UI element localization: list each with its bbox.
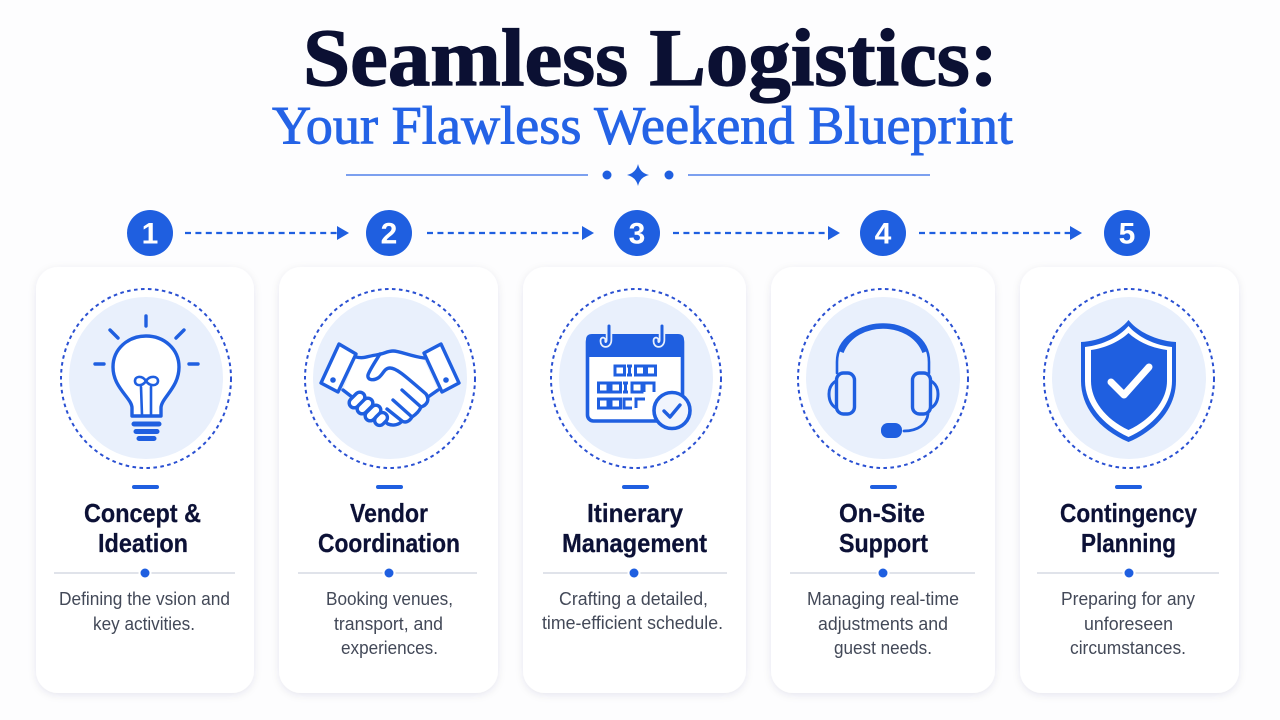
heading: Management — [562, 528, 707, 558]
icon: handshake — [321, 344, 459, 427]
description — [326, 588, 453, 658]
description — [542, 588, 723, 633]
step 1 badge: 1 — [142, 218, 158, 250]
title: Seamless Logistics: — [303, 12, 998, 103]
heading: Itinerary — [587, 498, 683, 528]
description: unforeseen — [1084, 613, 1173, 634]
accent bar — [376, 485, 403, 489]
arrow 4 to 5 — [919, 226, 1082, 240]
description — [1061, 588, 1196, 658]
step 4 badge: 4 — [875, 218, 892, 250]
description: Preparing for any — [1061, 588, 1196, 609]
description: Crafting a detailed, — [559, 588, 708, 609]
description — [807, 588, 959, 658]
arrow 1 to 2 — [185, 226, 349, 240]
heading: Coordination — [318, 528, 460, 558]
heading: On-Site — [839, 498, 925, 528]
accent bar — [132, 485, 159, 489]
panel: itinerary management — [523, 267, 746, 693]
panel: concept and ideation — [36, 267, 254, 693]
heading — [562, 498, 707, 558]
heading — [839, 498, 928, 558]
panel: on-site support — [771, 267, 995, 693]
panel: contingency planning — [1020, 267, 1239, 693]
step 5 badge: 5 — [1119, 218, 1135, 250]
description: experiences. — [341, 637, 438, 658]
step 3 badge: 3 — [629, 218, 645, 250]
arrow 2 to 3 — [427, 226, 594, 240]
icon: headset — [829, 325, 938, 438]
icon: light bulb — [95, 316, 198, 438]
description: time-efficient schedule. — [542, 612, 723, 633]
ornament divider — [346, 164, 930, 186]
description: Managing real-time — [807, 588, 959, 609]
heading: Support — [839, 528, 928, 558]
heading — [84, 498, 201, 558]
description: circumstances. — [1070, 637, 1186, 658]
description: Booking venues, — [326, 588, 453, 609]
accent bar — [870, 485, 897, 489]
subtitle: Your Flawless Weekend Blueprint — [272, 96, 1013, 156]
step 5 badge — [1104, 210, 1150, 256]
accent bar — [1115, 485, 1142, 489]
description: guest needs. — [834, 637, 932, 658]
step 2 badge — [366, 210, 412, 256]
heading: Concept & — [84, 498, 201, 528]
heading: Vendor — [350, 498, 428, 528]
description: key activities. — [93, 613, 195, 634]
step 1 badge — [127, 210, 173, 256]
description: transport, and — [334, 613, 443, 634]
description: Defining the vsion and — [59, 588, 230, 609]
description: adjustments and — [818, 613, 948, 634]
description — [59, 588, 230, 634]
icon: calendar — [586, 326, 690, 428]
arrow 3 to 4 — [673, 226, 840, 240]
panel: vendor coordination — [279, 267, 498, 693]
step 2 badge: 2 — [381, 218, 397, 250]
heading: Ideation — [98, 528, 188, 558]
step 4 badge — [860, 210, 906, 256]
heading — [1060, 498, 1197, 558]
heading: Planning — [1081, 528, 1176, 558]
icon: shield — [1081, 320, 1176, 442]
heading: Contingency — [1060, 498, 1197, 528]
accent bar — [622, 485, 649, 489]
step 3 badge — [614, 210, 660, 256]
heading — [318, 498, 460, 558]
